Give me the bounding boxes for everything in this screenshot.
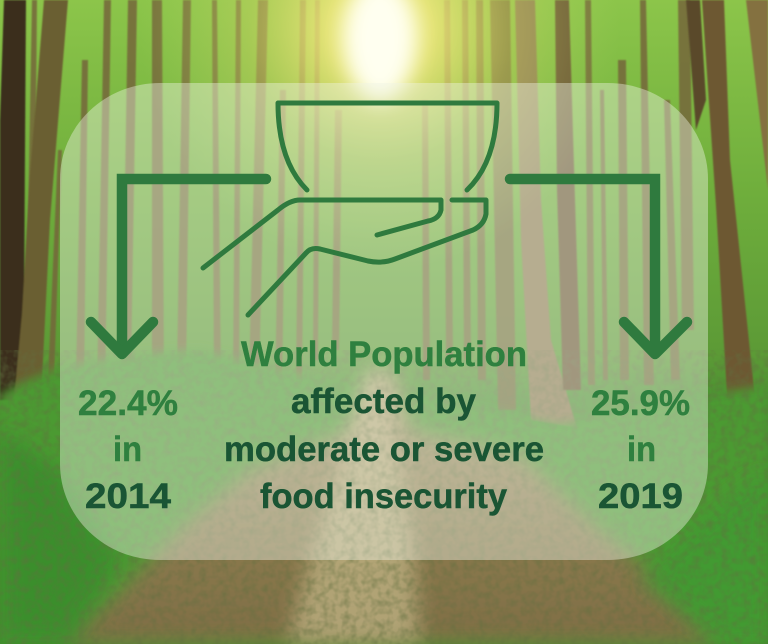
forest path — [0, 372, 768, 644]
central text block: moderate or severe — [224, 430, 544, 469]
sunlight glow — [140, 0, 620, 270]
stat: 22.4% in 2014: 2014 — [85, 477, 172, 516]
foreground tree trunks — [0, 0, 768, 446]
stat: 25.9% in 2019: in — [627, 430, 656, 469]
stat: 25.9% in 2019 — [591, 384, 690, 516]
stat: 22.4% in 2014: in — [113, 430, 142, 469]
hand palm and fingers — [203, 200, 441, 268]
foliage and leaf-litter texture — [0, 350, 768, 644]
translucent panel — [60, 83, 708, 560]
stat: 25.9% in 2019: 2019 — [598, 477, 683, 516]
central text block: food insecurity — [260, 477, 508, 516]
arrow: right, down to 2019 — [510, 179, 687, 354]
stat: 22.4% in 2014: 22.4% — [78, 384, 178, 423]
arrow: left, down to 2014 — [91, 179, 266, 354]
central text block: World Population — [241, 335, 527, 374]
bowl — [278, 103, 497, 190]
icon: bowl on open hand — [203, 103, 497, 315]
stat: 25.9% in 2019: 25.9% — [591, 384, 690, 423]
stat: 22.4% in 2014 — [78, 384, 178, 516]
forest ground and undergrowth — [0, 350, 768, 644]
central text block: affected by — [291, 382, 477, 421]
hand lower edge and thumb — [248, 200, 486, 315]
central text block — [224, 335, 544, 516]
